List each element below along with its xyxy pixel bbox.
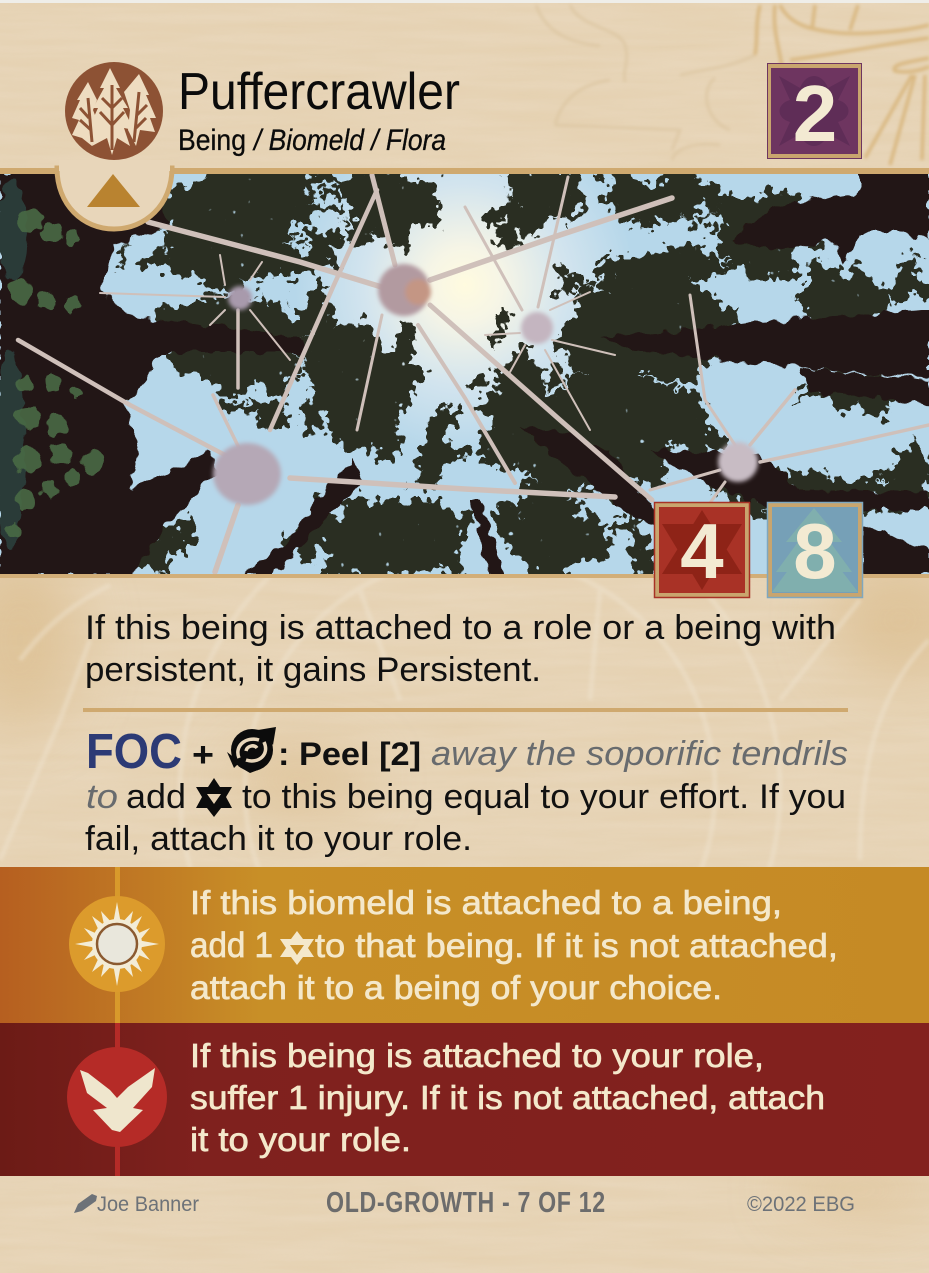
- stat badge: 8: [768, 502, 862, 598]
- failure effect text: it to your role.: [190, 1121, 411, 1158]
- sun effect text: attach it to a being of your choice.: [190, 969, 722, 1006]
- rules text: peel ability: +: [192, 736, 214, 774]
- title: Puffercrawler: [178, 63, 460, 121]
- rules text: peel ability: : Peel [2]: [278, 736, 421, 772]
- rules text: peel ability: [85, 725, 848, 858]
- rules text: passive ability: [85, 609, 836, 689]
- icon: star token: [196, 778, 232, 817]
- rules text: peel ability: to this being equal to your effort. If you: [242, 778, 846, 816]
- sky: [0, 172, 929, 575]
- sun effect text: add 1: [190, 926, 273, 965]
- copyright: ©2022 EBG: [747, 1193, 855, 1216]
- puffer bodies: [213, 264, 758, 505]
- left shadowed boughs: [0, 180, 26, 550]
- stat badge: 4: [654, 502, 750, 598]
- icon: star token: [280, 931, 314, 965]
- subtitle: Being: [178, 124, 246, 157]
- sun effect text: to that being. If it is not attached,: [315, 927, 838, 964]
- rules text: passive ability: If this being is attached to a role or a being with: [85, 609, 836, 647]
- icon: forest emblem: [65, 62, 163, 160]
- photo bottom edge: [0, 574, 929, 578]
- stat badge: 4: 4: [680, 507, 724, 595]
- left ivy leaves: [8, 210, 104, 537]
- rules text: passive ability: persistent, it gains Persistent.: [85, 651, 541, 689]
- icon: level triangle: [87, 174, 140, 207]
- photo: puffercrawlers in the forest canopy: [0, 165, 929, 578]
- header band edge with notch: [0, 160, 929, 229]
- rules text: peel ability: add: [126, 778, 186, 816]
- tendrils: [18, 175, 929, 572]
- cost badge: 2: 2: [793, 69, 837, 158]
- panel: sun effect: [0, 867, 929, 1023]
- foliage: [128, 165, 929, 578]
- icon: swirl: [227, 727, 276, 773]
- panel: failure effect: [0, 1023, 929, 1176]
- rules text: peel ability: to: [86, 778, 118, 816]
- failure effect text: [190, 1037, 825, 1158]
- icon: artist pen: [74, 1194, 97, 1213]
- rules text: peel ability: FOC: [86, 725, 182, 779]
- icon: phoenix: [67, 1047, 167, 1147]
- sun effect text: [190, 884, 838, 1006]
- failure effect text: suffer 1 injury. If it is not attached, attach: [190, 1079, 825, 1116]
- engraved paper art: circle motif: [0, 490, 929, 1090]
- sun effect text: If this biomeld is attached to a being,: [190, 884, 782, 921]
- engraved paper art: top right: [536, 5, 929, 165]
- rules text: peel ability: away the soporific tendrils: [431, 735, 848, 773]
- trunks: [0, 172, 929, 575]
- failure effect text: If this being is attached to your role,: [190, 1037, 764, 1074]
- stat badge: 8: 8: [793, 507, 837, 595]
- artist credit: Joe Banner: [97, 1193, 199, 1216]
- rules text: peel ability: fail, attach it to your role.: [85, 820, 472, 858]
- icon: sun: [69, 896, 165, 992]
- subtitle: / Biomeld / Flora: [252, 124, 446, 157]
- cost badge: 2: [768, 64, 862, 158]
- set label: OLD-GROWTH - 7 OF 12: [326, 1185, 605, 1219]
